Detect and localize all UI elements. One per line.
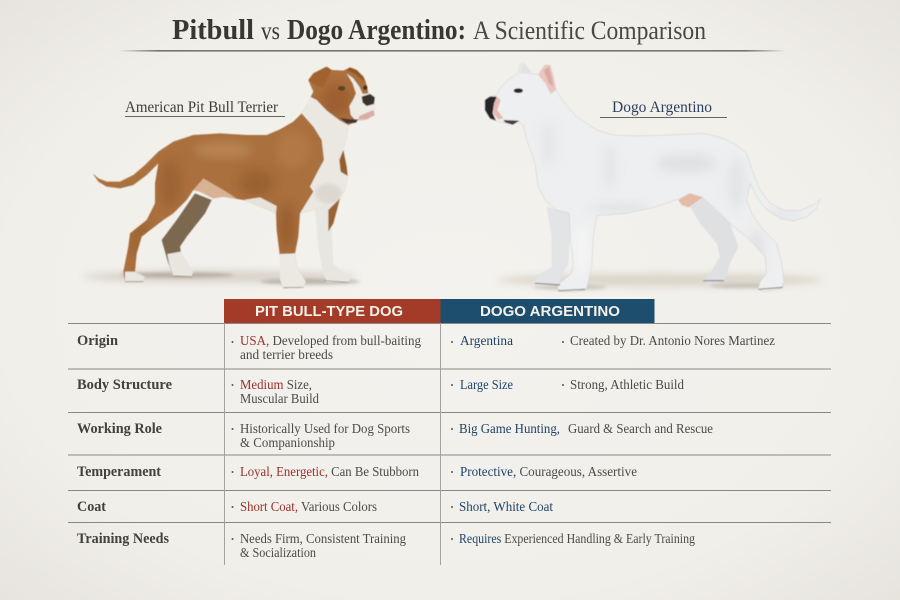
row: training needs <box>77 531 695 560</box>
row: body structure: Strong, Athletic Build <box>570 377 684 392</box>
row: training needs: Training Needs <box>77 531 169 547</box>
row: origin: Origin <box>77 333 119 349</box>
row: working role: Big Game Hunting, <box>459 421 560 436</box>
row: origin: Created by Dr. Antonio Nores Martinez <box>570 333 775 348</box>
row: body structure: Large Size <box>460 377 513 392</box>
label: Dogo Argentino: Dogo Argentino <box>612 99 712 116</box>
table header: dogo argentino: DOGO ARGENTINO <box>480 304 620 320</box>
title: Dogo Argentino: <box>287 14 466 46</box>
title: A Scientific Comparison <box>473 16 706 45</box>
table header: pit bull-type dog <box>224 299 440 324</box>
row: origin <box>77 333 775 362</box>
row: temperament: Loyal, Energetic, Can Be Stubborn <box>240 464 419 479</box>
row: body structure: Medium Size, <box>240 377 312 392</box>
row: body structure: Muscular Build <box>240 391 319 406</box>
row: training needs: & Socialization <box>240 545 316 560</box>
row: coat <box>77 499 553 515</box>
row: origin: USA, Developed from bull-baiting <box>240 333 421 348</box>
row: body structure: Body Structure <box>77 377 172 393</box>
row: body structure <box>77 377 684 406</box>
table header: dogo argentino <box>440 299 654 324</box>
row: temperament <box>77 464 637 480</box>
row: working role: Historically Used for Dog Sports <box>240 421 410 436</box>
row: origin: and terrier breeds <box>240 347 333 362</box>
row: working role: & Companionship <box>240 435 335 450</box>
row: working role <box>77 421 713 450</box>
title: Pitbull <box>172 14 254 46</box>
row: temperament: Temperament <box>77 464 161 480</box>
row: origin: Argentina <box>460 333 513 348</box>
row: temperament: Protective, Courageous, Assertive <box>460 464 637 479</box>
label: American Pit Bull Terrier: American Pit Bull Terrier <box>125 99 279 116</box>
row: training needs: Requires Experienced Handling & Early Training <box>459 531 695 546</box>
row: training needs: Needs Firm, Consistent Training <box>240 531 406 546</box>
illustration: dogo argentino <box>485 63 823 292</box>
row: coat: Short Coat, Various Colors <box>240 499 377 514</box>
row: working role: Guard & Search and Rescue <box>568 421 713 436</box>
illustration: pit bull <box>83 67 375 288</box>
title: vs <box>261 18 280 45</box>
row: coat: Coat <box>77 499 106 515</box>
title <box>172 14 706 46</box>
row: working role: Working Role <box>77 421 162 437</box>
row: coat: Short, White Coat <box>459 499 553 514</box>
table header: pit bull-type dog: PIT BULL-TYPE DOG <box>255 304 403 320</box>
